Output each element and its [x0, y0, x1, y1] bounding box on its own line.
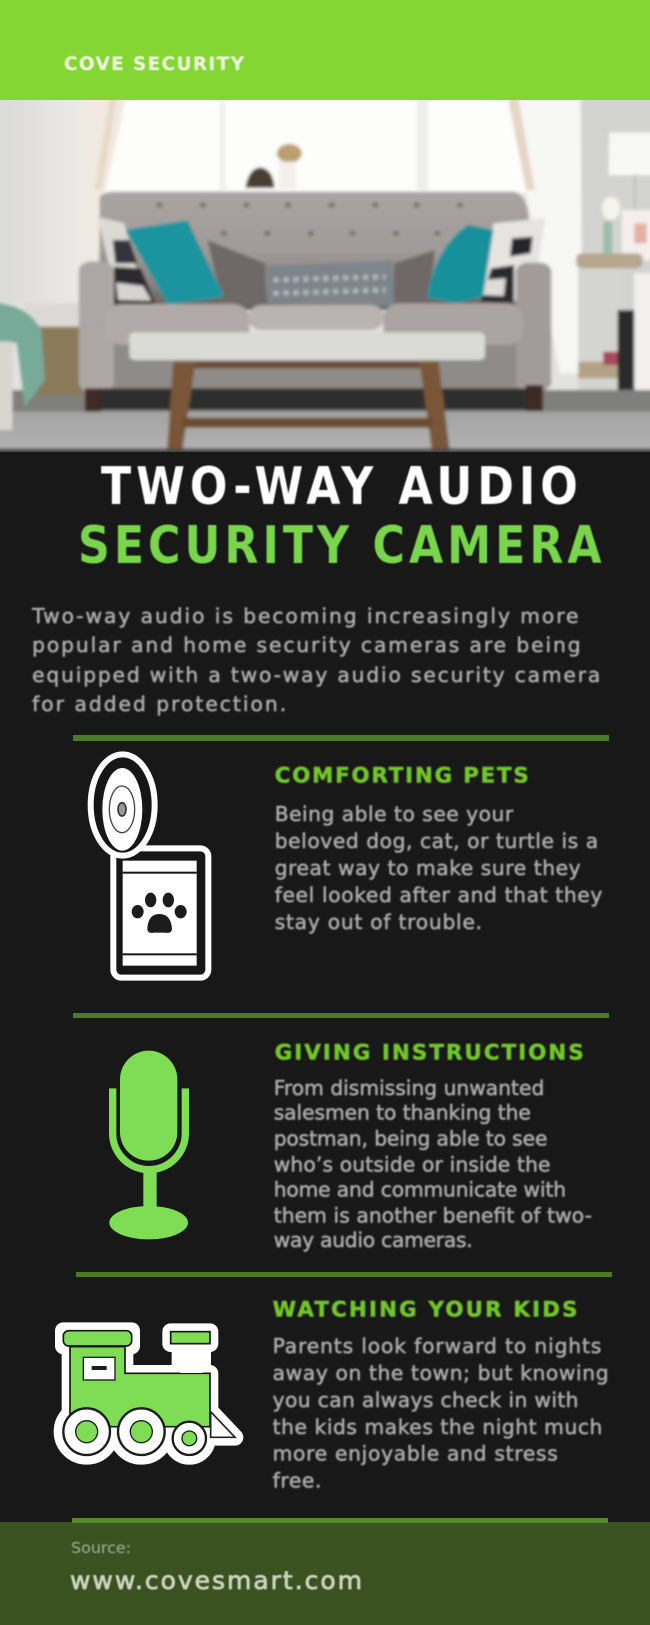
brand name: COVE SECURITY: [64, 54, 245, 75]
body: watching your kids: [273, 1334, 609, 1493]
body: comforting pets: stay out of trouble.: [275, 910, 482, 934]
divider 1: [73, 735, 609, 741]
body: giving instructions: way audio cameras.: [274, 1228, 473, 1252]
body: giving instructions: [274, 1076, 592, 1252]
body: giving instructions: who’s outside or inside the: [274, 1152, 550, 1176]
heading: giving instructions: GIVING INSTRUCTIONS: [275, 1041, 584, 1066]
section: comforting pets: [275, 764, 602, 934]
body: watching your kids: the kids makes the night much: [273, 1415, 602, 1439]
body: watching your kids: Parents look forward to nights: [273, 1334, 601, 1358]
heading: watching your kids: WATCHING YOUR KIDS: [273, 1298, 577, 1323]
body: watching your kids: you can always check in with: [273, 1388, 578, 1412]
intro paragraph: popular and home security cameras are being: [32, 633, 581, 657]
icon: microphone: [109, 1051, 188, 1239]
title line two: SECURITY CAMERA: [78, 516, 602, 576]
header band: [0, 0, 650, 100]
intro paragraph: Two-way audio is becoming increasingly more: [31, 604, 578, 628]
footer band: [0, 1522, 650, 1625]
intro paragraph: for added protection.: [32, 692, 286, 716]
section: giving instructions: [274, 1041, 592, 1252]
body: comforting pets: feel looked after and that they: [275, 883, 602, 907]
intro paragraph: [31, 604, 600, 716]
divider 3: [76, 1272, 612, 1277]
source url: www.covesmart.com: [70, 1566, 362, 1595]
intro paragraph: equipped with a two-way audio security camera: [32, 663, 600, 687]
body: giving instructions: From dismissing unwanted: [274, 1076, 544, 1100]
heading: comforting pets: COMFORTING PETS: [275, 764, 529, 789]
divider 4: [72, 1518, 608, 1523]
source label: Source:: [71, 1539, 131, 1557]
body: comforting pets: Being able to see your: [275, 802, 514, 826]
body: watching your kids: more enjoyable and stress: [273, 1442, 558, 1466]
body: giving instructions: home and communicate with: [274, 1177, 566, 1201]
icon: toy train: [62, 1331, 235, 1456]
body: comforting pets: great way to make sure they: [275, 856, 581, 880]
body: comforting pets: beloved dog, cat, or turtle is a: [275, 829, 598, 853]
icon: camera and phone with paw: [91, 754, 208, 978]
body: watching your kids: free.: [273, 1469, 321, 1493]
body: watching your kids: away on the town; but knowing: [273, 1361, 609, 1385]
body: giving instructions: postman, being able to see: [274, 1127, 547, 1151]
photo: living room with sofa: [0, 100, 650, 452]
title line one: TWO-WAY AUDIO: [101, 457, 578, 517]
body: comforting pets: [275, 802, 602, 934]
divider 2: [73, 1013, 609, 1018]
section: watching your kids: [273, 1298, 609, 1493]
body: giving instructions: salesmen to thanking the: [274, 1101, 531, 1125]
body: giving instructions: them is another benefit of two-: [274, 1203, 592, 1227]
